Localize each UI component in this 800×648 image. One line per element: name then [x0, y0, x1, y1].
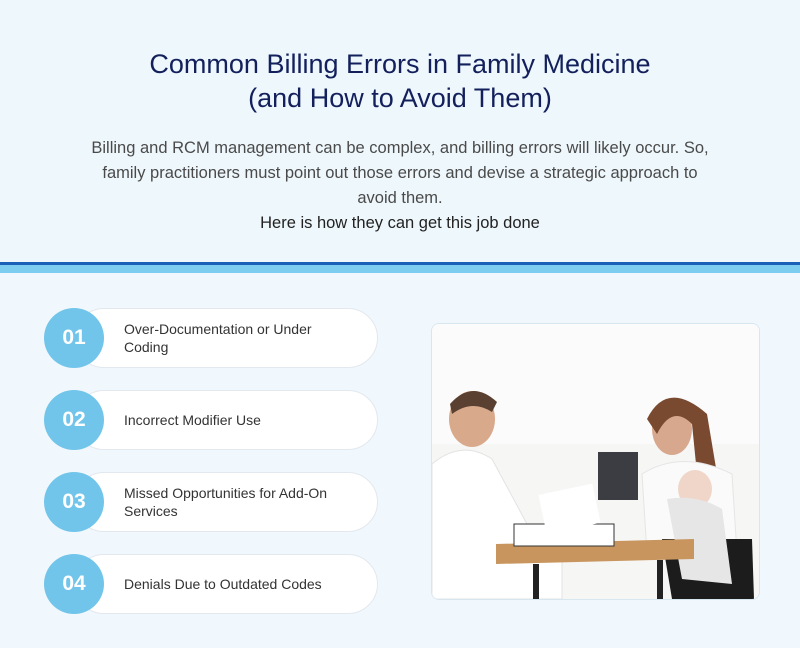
intro text: Billing and RCM management can be complex, and billing errors will likely occur. So, [91, 139, 709, 157]
intro text [91, 139, 709, 232]
item 03: Missed Opportunities for Add-On Services [124, 485, 327, 519]
intro text: family practitioners must point out those errors and devise a strategic approach to [102, 164, 698, 182]
mother [652, 403, 692, 455]
item 02 [44, 390, 378, 450]
divider band [0, 262, 800, 273]
item 03 [44, 472, 378, 532]
desk [496, 539, 694, 564]
title [149, 49, 651, 113]
item 01: 01 [62, 326, 86, 349]
item 03: 03 [62, 490, 86, 513]
photo: doctor with mother and baby [431, 323, 760, 600]
item 01 [44, 308, 378, 368]
intro text: avoid them. [357, 189, 443, 207]
laptop [598, 452, 638, 500]
item 02: Incorrect Modifier Use [124, 412, 261, 428]
item 04: 04 [62, 572, 86, 595]
item 01: Over-Documentation or Under Coding [124, 321, 312, 355]
title: (and How to Avoid Them) [248, 83, 552, 113]
title: Common Billing Errors in Family Medicine [149, 49, 651, 79]
header background [0, 0, 800, 263]
doctor [449, 391, 495, 447]
item 04 [44, 554, 378, 614]
item 02: 02 [62, 408, 86, 431]
intro text: Here is how they can get this job done [260, 214, 540, 232]
baby [678, 470, 712, 508]
item 04: Denials Due to Outdated Codes [124, 576, 322, 592]
